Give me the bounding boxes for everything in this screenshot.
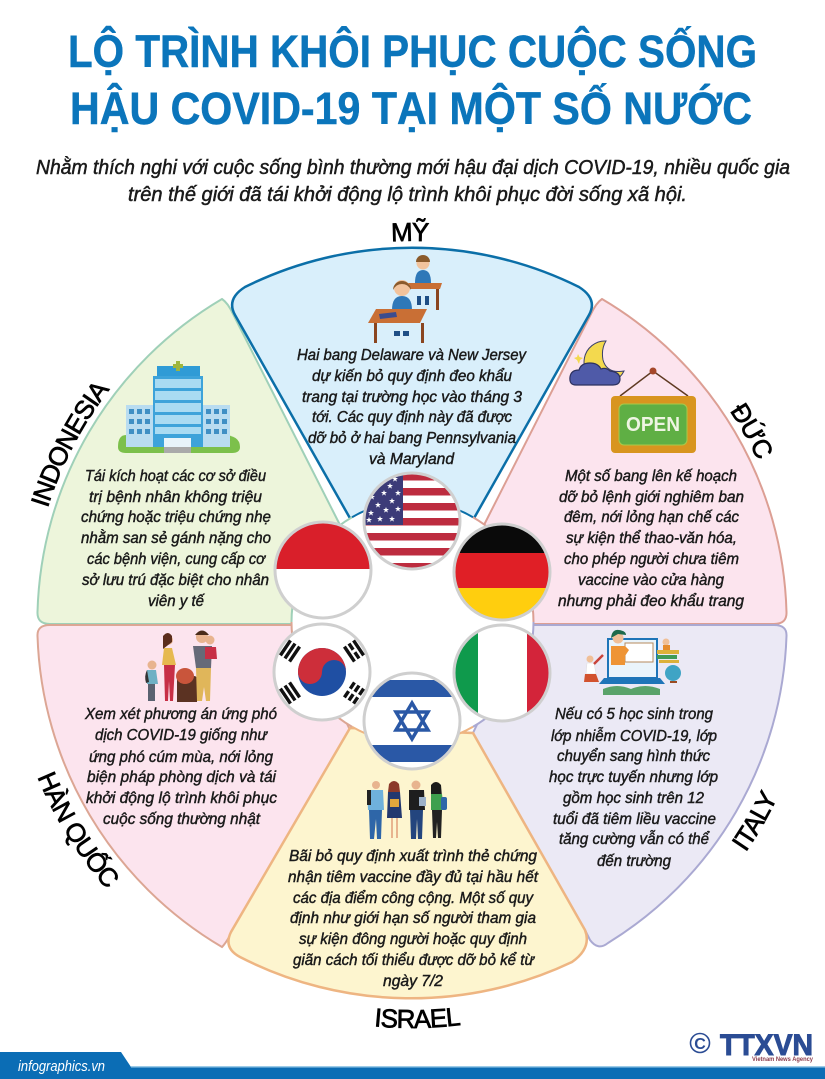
logo: TTXVN: C — [694, 1036, 706, 1053]
text: Israel: định như giới hạn số người tham gia — [290, 910, 536, 927]
title — [68, 26, 757, 134]
text: South Korea: khởi động lộ trình khôi phục — [86, 790, 277, 807]
text: Germany: nhưng phải đeo khẩu trang — [558, 592, 744, 610]
text: USA: trang tại trường học vào tháng 3 — [302, 389, 522, 406]
text: Indonesia — [81, 468, 271, 610]
text: Indonesia: chứng hoặc triệu chứng nhẹ — [81, 509, 271, 526]
icon: open sign — [611, 368, 696, 453]
text: Israel: sự kiện đông người hoặc quy định — [299, 931, 527, 948]
text: Israel: các địa điểm công cộng. Một số quy — [293, 889, 534, 907]
icon: hospital — [118, 361, 240, 453]
icon: moon and cloud — [570, 341, 624, 385]
text: Italy: lớp nhiễm COVID-19, lớp — [551, 726, 717, 745]
flag: Italy — [452, 624, 552, 722]
icon: open sign: OPEN — [626, 414, 680, 436]
text: Israel: ngày 7/2 — [383, 973, 443, 990]
text: USA: tới. Các quy định này đã được — [312, 409, 512, 426]
text: Indonesia: các bệnh viện, cung cấp cơ — [87, 551, 266, 568]
text: South Korea: cuộc sống thường nhật — [103, 811, 261, 828]
text: Italy: chuyển sang hình thức — [557, 747, 710, 765]
text: South Korea: dịch COVID-19 giống như — [95, 727, 269, 744]
intro text: Nhằm thích nghi với cuộc sống bình thường mới hậu đại dịch COVID-19, nhiều quốc gia — [36, 156, 790, 179]
text: Israel: nhận tiêm vaccine đầy đủ tại hầu hết — [288, 869, 539, 886]
text: Indonesia: trị bệnh nhân không triệu — [89, 489, 262, 506]
text: Indonesia: sở lưu trú đặc biệt cho nhân — [82, 572, 269, 589]
text: Israel: Bãi bỏ quy định xuất trình thẻ chứng — [289, 848, 537, 865]
icon: online learning — [584, 630, 681, 695]
text: Italy: học trực tuyến nhưng lớp — [549, 769, 718, 786]
label: MỸ: MỸ — [392, 218, 430, 242]
icon: family — [145, 630, 217, 702]
icon: students group — [367, 780, 447, 839]
text: Italy: tuổi đã tiêm liều vaccine — [553, 810, 716, 828]
text: USA — [297, 347, 527, 468]
flag: Indonesia — [274, 520, 372, 620]
text: USA: dỡ bỏ ở hai bang Pennsylvania — [308, 430, 516, 447]
label: ITALY: ITALY — [732, 788, 775, 852]
label: ISRAEL: ISRAEL — [376, 1008, 461, 1028]
text: South Korea: ứng phó cúm mùa, nới lỏng — [89, 749, 273, 766]
text: USA: dự kiến bỏ quy định đeo khẩu — [312, 367, 512, 385]
text: South Korea: biện pháp phòng dịch và tái — [87, 769, 276, 786]
text: Israel — [288, 848, 539, 990]
flag: USA — [362, 472, 462, 570]
text: Germany: dỡ bỏ lệnh giới nghiêm ban — [559, 489, 744, 506]
panel: South Korea — [37, 625, 350, 947]
logo: TTXVN: Vietnam News Agency — [752, 1057, 814, 1063]
panel: Israel — [228, 728, 587, 998]
text: Italy — [549, 706, 718, 870]
intro text — [36, 156, 790, 206]
panel: USA — [232, 248, 592, 520]
text: Indonesia: viên y tế — [148, 593, 205, 610]
text: Italy: Nếu có 5 học sinh trong — [555, 706, 713, 723]
text: Italy: đến trường — [597, 853, 671, 870]
intro text: trên thế giới đã tái khởi động lộ trình khôi phục đời sống xã hội. — [128, 183, 687, 206]
text: Italy: tăng cường vẫn có thể — [559, 829, 710, 848]
footer bar — [0, 1052, 825, 1079]
text: Israel: giãn cách tối thiểu được dỡ bỏ kể từ — [293, 951, 536, 969]
central white circle — [292, 501, 534, 743]
text: Germany: cho phép người chưa tiêm — [564, 551, 739, 568]
text: Germany: Một số bang lên kế hoạch — [565, 468, 737, 485]
text: Germany: sự kiện thể thao-văn hóa, — [566, 529, 737, 547]
panel: Indonesia — [37, 299, 340, 624]
footer source: infographics.vn — [18, 1058, 105, 1075]
text: Germany — [558, 468, 744, 610]
flag: Israel — [360, 673, 470, 769]
label: ĐỨC: ĐỨC — [730, 402, 772, 458]
title: LỘ TRÌNH KHÔI PHỤC CUỘC SỐNG — [68, 26, 757, 77]
panel: Italy — [473, 625, 787, 946]
title: HẬU COVID-19 TẠI MỘT SỐ NƯỚC — [70, 83, 752, 134]
text: USA: và Maryland — [369, 451, 455, 468]
text: Indonesia: Tái kích hoạt các cơ sở điều — [85, 468, 266, 485]
panel: Germany — [484, 299, 787, 624]
label: INDONESIA: INDONESIA — [30, 384, 110, 506]
text: South Korea — [84, 706, 277, 828]
text: Indonesia: nhằm san sẻ gánh nặng cho — [81, 528, 271, 547]
text: USA: Hai bang Delaware và New Jersey — [297, 347, 527, 364]
logo: TTXVN: TTXVN — [720, 1029, 813, 1062]
text: Germany: vaccine vào cửa hàng — [578, 572, 724, 589]
text: Italy: gồm học sinh trên 12 — [563, 790, 704, 807]
text: Germany: đêm, nới lỏng hạn chế các — [564, 509, 739, 526]
text: South Korea: Xem xét phương án ứng phó — [84, 706, 277, 723]
flag: South Korea — [274, 624, 370, 720]
icon: students at desks — [368, 255, 442, 343]
label: HÀN QUỐC: HÀN QUỐC — [38, 771, 118, 887]
flag: Germany — [452, 522, 552, 622]
